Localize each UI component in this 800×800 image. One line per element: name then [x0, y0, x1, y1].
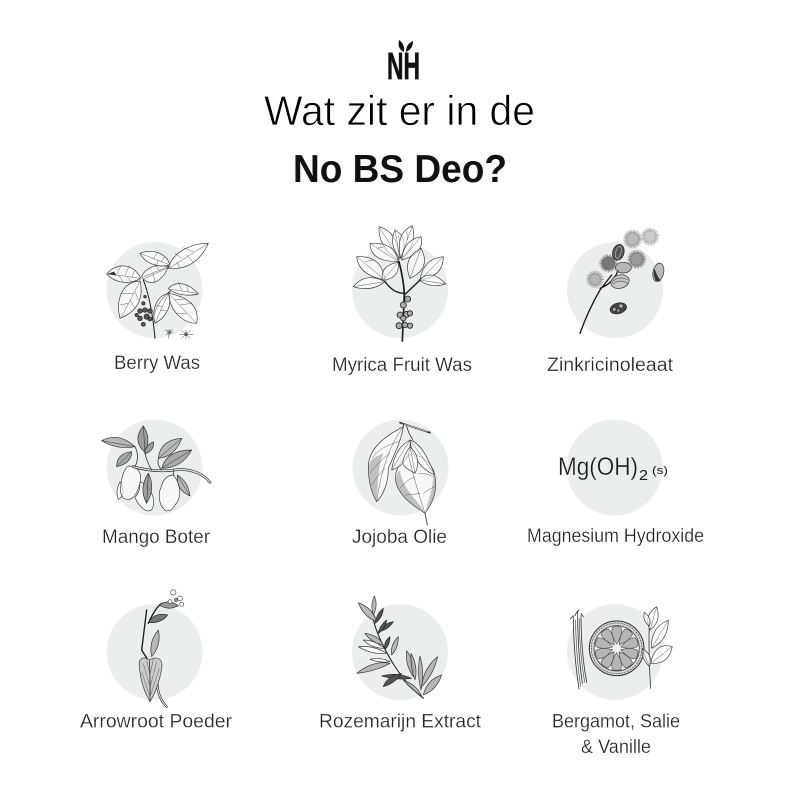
label: Zinkricinoleaat: Zinkricinoleaat	[547, 355, 674, 376]
panel: Zinkricinoleaat	[567, 230, 665, 338]
icon: arrowroot plant	[139, 590, 184, 707]
icon: vanilla, bergamot and sage	[570, 607, 672, 689]
panel: Arrowroot Poeder	[106, 590, 202, 707]
label: Bergamot, Salie & Vanille: Bergamot, Salie	[552, 712, 680, 732]
panel: Myrica Fruit Was	[352, 226, 448, 341]
label: Mango Boter: Mango Boter	[102, 527, 211, 548]
label: Bergamot, Salie & Vanille: & Vanille	[581, 737, 651, 758]
panel: Mango Boter	[102, 420, 210, 516]
icon: myrica branch	[353, 226, 446, 341]
label: Myrica Fruit Was: Myrica Fruit Was	[332, 355, 472, 376]
icon: mango branch	[102, 426, 210, 511]
title	[264, 87, 535, 191]
title: Wat zit er in de	[264, 87, 535, 134]
logo: NH with leaves	[387, 40, 420, 88]
label: Berry Was: Berry Was	[114, 353, 200, 374]
label: Rozemarijn Extract: Rozemarijn Extract	[319, 712, 482, 732]
panel: Berry Was	[106, 242, 208, 339]
icon: chemical formula: 2	[639, 467, 648, 484]
icon: jojoba leaves	[368, 423, 436, 525]
panel: Jojoba Olie	[352, 420, 448, 525]
icon: chemical formula: (s)	[652, 465, 668, 477]
icon: chemical formula: Mg(OH)	[558, 453, 638, 481]
title: No BS Deo?	[293, 148, 507, 191]
panel: Magnesium Hydroxide	[558, 420, 668, 516]
icon: rosemary sprig	[357, 596, 442, 698]
logo: NH with leaves: NH	[387, 46, 420, 88]
label: Magnesium Hydroxide: Magnesium Hydroxide	[527, 526, 704, 547]
icon: berry plant	[107, 243, 208, 339]
panel: Rozemarijn Extract	[352, 596, 448, 700]
label: Jojoba Olie: Jojoba Olie	[352, 527, 447, 548]
panel: Bergamot, Salie & Vanille	[567, 604, 672, 700]
label: Arrowroot Poeder: Arrowroot Poeder	[80, 712, 233, 732]
label: Bergamot, Salie & Vanille	[552, 712, 680, 758]
icon: castor seeds	[580, 230, 665, 333]
